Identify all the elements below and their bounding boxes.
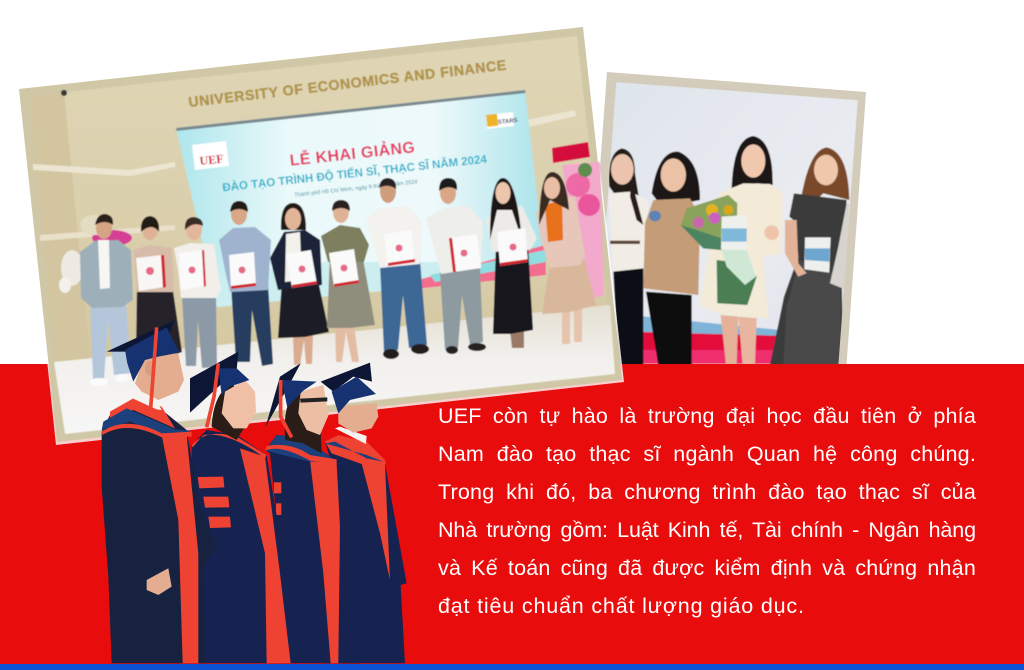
flowers left <box>59 215 132 293</box>
person A <box>608 148 648 365</box>
person 4: man in checked shirt <box>219 201 273 366</box>
LED screen <box>176 90 546 307</box>
blue bottom bar <box>0 664 1024 670</box>
camera <box>61 90 67 96</box>
photo frame <box>585 72 866 372</box>
person 3: woman in white top <box>174 217 221 368</box>
body paragraph: đạt tiêu chuẩn chất lượng giáo dục. <box>438 594 805 618</box>
graduate 1 <box>102 320 217 663</box>
logo stars: STARS <box>498 118 518 126</box>
photo frame <box>19 27 622 442</box>
photo scene <box>30 36 615 434</box>
wall sign: UNIVERSITY OF ECONOMICS AND FINANCE <box>188 58 508 111</box>
person B <box>643 152 700 365</box>
logo UEF <box>192 141 229 170</box>
body paragraph: Trong khi đó, ba chương trình đào tạo thạc sĩ của <box>438 480 976 504</box>
screen subtitle: ĐÀO TẠO TRÌNH ĐỘ TIẾN SĨ, THẠC SĨ NĂM 2024 <box>222 153 488 194</box>
graduate 2 <box>190 352 291 663</box>
flowers right <box>552 142 604 300</box>
body paragraph: Nam đào tạo thạc sĩ ngành Quan hệ công chúng. <box>438 442 976 466</box>
screen heading: LỄ KHAI GIẢNG <box>289 137 416 170</box>
body paragraph: UEF còn tự hào là trường đại học đầu tiên ở phía <box>438 404 976 428</box>
person 1: man in light suit <box>80 214 133 386</box>
graduates group <box>102 320 407 663</box>
graduate 4 <box>321 363 407 663</box>
logo UEF: UEF <box>199 151 224 168</box>
person 7: man in white shirt and jeans <box>366 178 429 359</box>
person C <box>699 136 783 365</box>
person 9: woman with long hair and black skirt <box>486 178 537 348</box>
white outline <box>18 25 624 445</box>
photo scene <box>595 82 858 370</box>
bouquet <box>681 195 757 305</box>
person 5: woman in black jacket <box>270 203 329 365</box>
logo stars <box>486 112 518 129</box>
photo: opening ceremony <box>18 25 624 445</box>
screen date: Thành phố Hồ Chí Minh, ngày 9 tháng 6 năm 2024 <box>294 179 418 199</box>
person 6: woman in olive dress <box>321 200 375 362</box>
photo: students with bouquet <box>585 72 866 372</box>
person 10: woman in beige blazer <box>536 172 596 344</box>
red background band <box>0 364 1024 664</box>
body paragraph: và Kế toán cũng đã được kiểm định và chứng nhận <box>438 556 976 580</box>
book held <box>721 215 747 250</box>
body paragraph <box>438 404 976 618</box>
person 8: man in white shirt and grey pants <box>426 178 486 354</box>
person D <box>770 147 849 365</box>
person 2: woman in pink top <box>133 216 182 360</box>
body paragraph: Nhà trường gồm: Luật Kinh tế, Tài chính - Ngân hàng <box>438 518 976 542</box>
graduate 3 <box>265 363 358 663</box>
